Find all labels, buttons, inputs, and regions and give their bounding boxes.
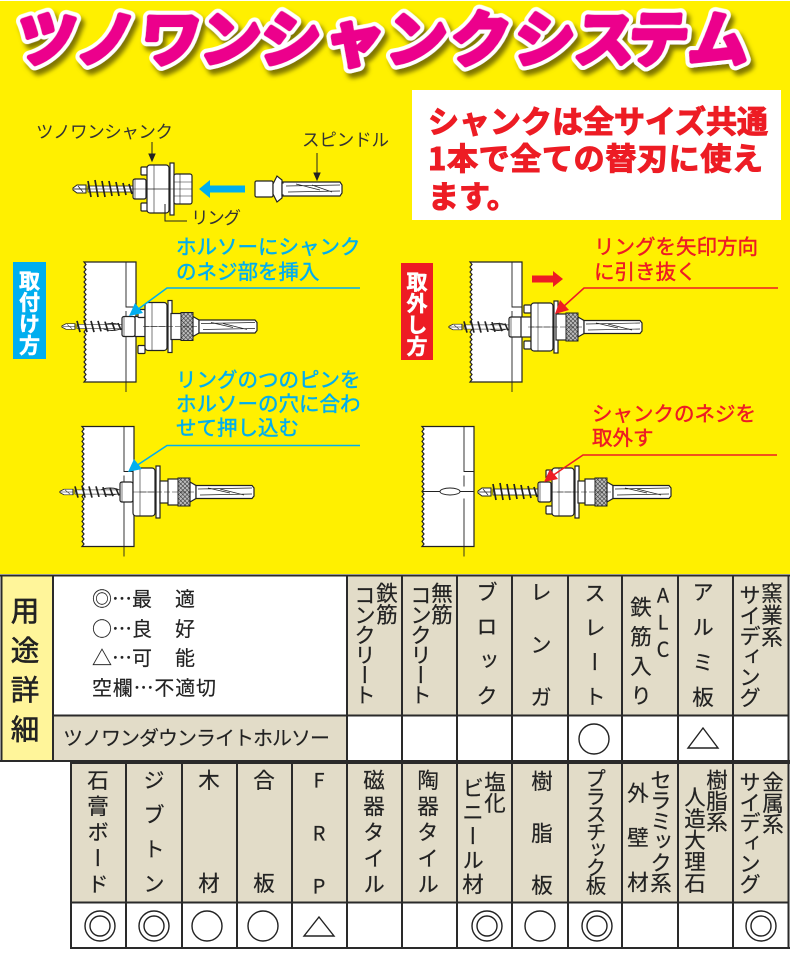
illustration [422, 426, 671, 556]
column: metal siding: 金属系 [758, 771, 788, 835]
column: resin artificial marble: 人造大理石 [680, 786, 710, 894]
illustration [60, 426, 254, 556]
diagram: shank and spindle overview [36, 119, 389, 230]
arrow: red leader [563, 288, 778, 307]
instruction text: せて押し込む [176, 411, 299, 441]
arrow head [555, 300, 569, 314]
instruction text: シャンクのネジを [592, 397, 756, 427]
instruction text: リングのつのピンを [176, 363, 360, 393]
instruction text: ホルソーの穴に合わ [176, 387, 360, 417]
column: PVC [458, 771, 510, 897]
column: ALC with rebar: ALC [648, 585, 678, 666]
column: plain concrete: コンクリート [406, 584, 436, 704]
column: ceramic siding [734, 582, 788, 708]
instruction text [176, 363, 360, 441]
column: plastic plate: プラスチック板 [581, 768, 611, 895]
arrow: blue insertion [199, 180, 245, 198]
row label: down light hole saw: ツノワンダウンライトホルソー [63, 722, 330, 751]
column: ALC with rebar [626, 585, 678, 714]
column: slate: スレート [580, 582, 610, 720]
shank assembly [73, 163, 192, 215]
column: aluminium plate: アルミ板 [688, 581, 718, 721]
message text: 1本で全ての替刃に使え [428, 134, 763, 179]
column: porcelain tile: 磁器タイル [358, 769, 390, 899]
symbol: wood good [192, 911, 222, 941]
step 3: pull ring [449, 230, 778, 392]
symbol: PVC best [472, 911, 502, 941]
instruction text [176, 230, 360, 285]
legend: ○…良 好 [92, 613, 195, 642]
step 4: remove shank screw [422, 397, 777, 556]
column: resin artificial marble: 樹脂系 [702, 769, 732, 833]
symbol: metal siding best [746, 911, 776, 941]
column: FRP: FRP [304, 770, 334, 929]
label: spindle: スピンドル [302, 127, 389, 152]
instruction text [592, 397, 756, 451]
symbol: gypsum best [85, 911, 115, 941]
symbol: plywood good [248, 911, 278, 941]
illustration [449, 262, 642, 392]
illustration [62, 262, 257, 392]
panel: usage table bottom row [70, 762, 790, 958]
column: ceramic exterior: セラミック系 [646, 769, 676, 894]
message text: ます。 [428, 172, 518, 217]
column: resin artificial marble [680, 769, 732, 894]
heading: usage details: 用途詳細 [4, 596, 46, 754]
legend: ◎…最 適 [92, 583, 195, 612]
instruction text: のネジ部を挿入 [176, 255, 320, 285]
label: tsuno-one shank: ツノワンシャンク [36, 119, 173, 144]
column: metal siding: サイディング [734, 771, 766, 895]
leader: ring [165, 204, 187, 221]
column: gypsum board: 石膏ボード [82, 769, 114, 899]
callout: shank message [412, 90, 781, 220]
column: reinforced concrete [350, 582, 402, 704]
arrow: blue leader [136, 446, 360, 466]
legend: 空欄…不適切 [92, 672, 216, 701]
panel: usage table top row [0, 575, 790, 761]
symbol: FRP fair [304, 917, 334, 936]
message text [428, 97, 768, 217]
column: reinforced concrete: 鉄筋 [372, 582, 402, 625]
column: metal siding [734, 771, 788, 895]
symbol: gyptone best [139, 911, 169, 941]
column: ceramic tile: 陶器タイル [412, 769, 444, 899]
instruction text: ホルソーにシャンク [176, 230, 360, 260]
column: PVC: 塩化 [480, 771, 510, 814]
column: plain concrete [406, 582, 458, 704]
arrow: blue leader [137, 288, 360, 310]
column: gyptone: ジブトン [138, 769, 170, 907]
column: reinforced concrete: コンクリート [350, 584, 380, 704]
column: PVC: ビニール材 [458, 777, 488, 897]
column: ALC with rebar: 鉄筋入り [626, 596, 656, 714]
column: ceramic exterior [622, 769, 676, 916]
symbol: plastic best [582, 911, 612, 941]
spindle [255, 176, 342, 202]
tab: removing method: 取外し方 [402, 271, 432, 358]
tab: attaching method: 取付け方 [14, 270, 44, 357]
legend [92, 583, 216, 701]
instruction text: リングを矢印方向 [594, 230, 758, 260]
step 1: insert screw into hole saw [62, 230, 360, 392]
symbol: aluminium fair [688, 728, 718, 748]
arrow head [544, 469, 558, 482]
symbol: slate good [579, 724, 609, 754]
column: ceramic siding: サイディング [734, 584, 766, 708]
label: ring: リング [191, 205, 241, 230]
column: plain concrete: 無筋 [426, 582, 458, 625]
arrow head [128, 459, 142, 472]
column: brick: レンガ [526, 581, 556, 738]
column: block: ブロック [472, 581, 502, 719]
arrow: to spindle [314, 153, 320, 180]
instruction text: 取外す [592, 421, 654, 451]
background: yellow panel [0, 1, 790, 574]
arrow: pull direction [532, 271, 563, 287]
step 2: push ring pins into hole [60, 363, 360, 556]
legend: △…可 能 [92, 642, 195, 671]
instruction text [594, 230, 758, 285]
column: ceramic siding: 窯業系 [756, 582, 788, 648]
column: resin plate: 樹脂板 [526, 770, 558, 926]
arrow: red leader [552, 455, 777, 476]
arrow head [129, 303, 143, 316]
message text: シャンクは全サイズ共通 [428, 97, 768, 142]
arrow: to shank [149, 142, 155, 161]
instruction text: に引き抜く [594, 255, 696, 285]
column: ceramic exterior: 外壁材 [622, 782, 654, 916]
symbol: resin good [525, 911, 555, 941]
